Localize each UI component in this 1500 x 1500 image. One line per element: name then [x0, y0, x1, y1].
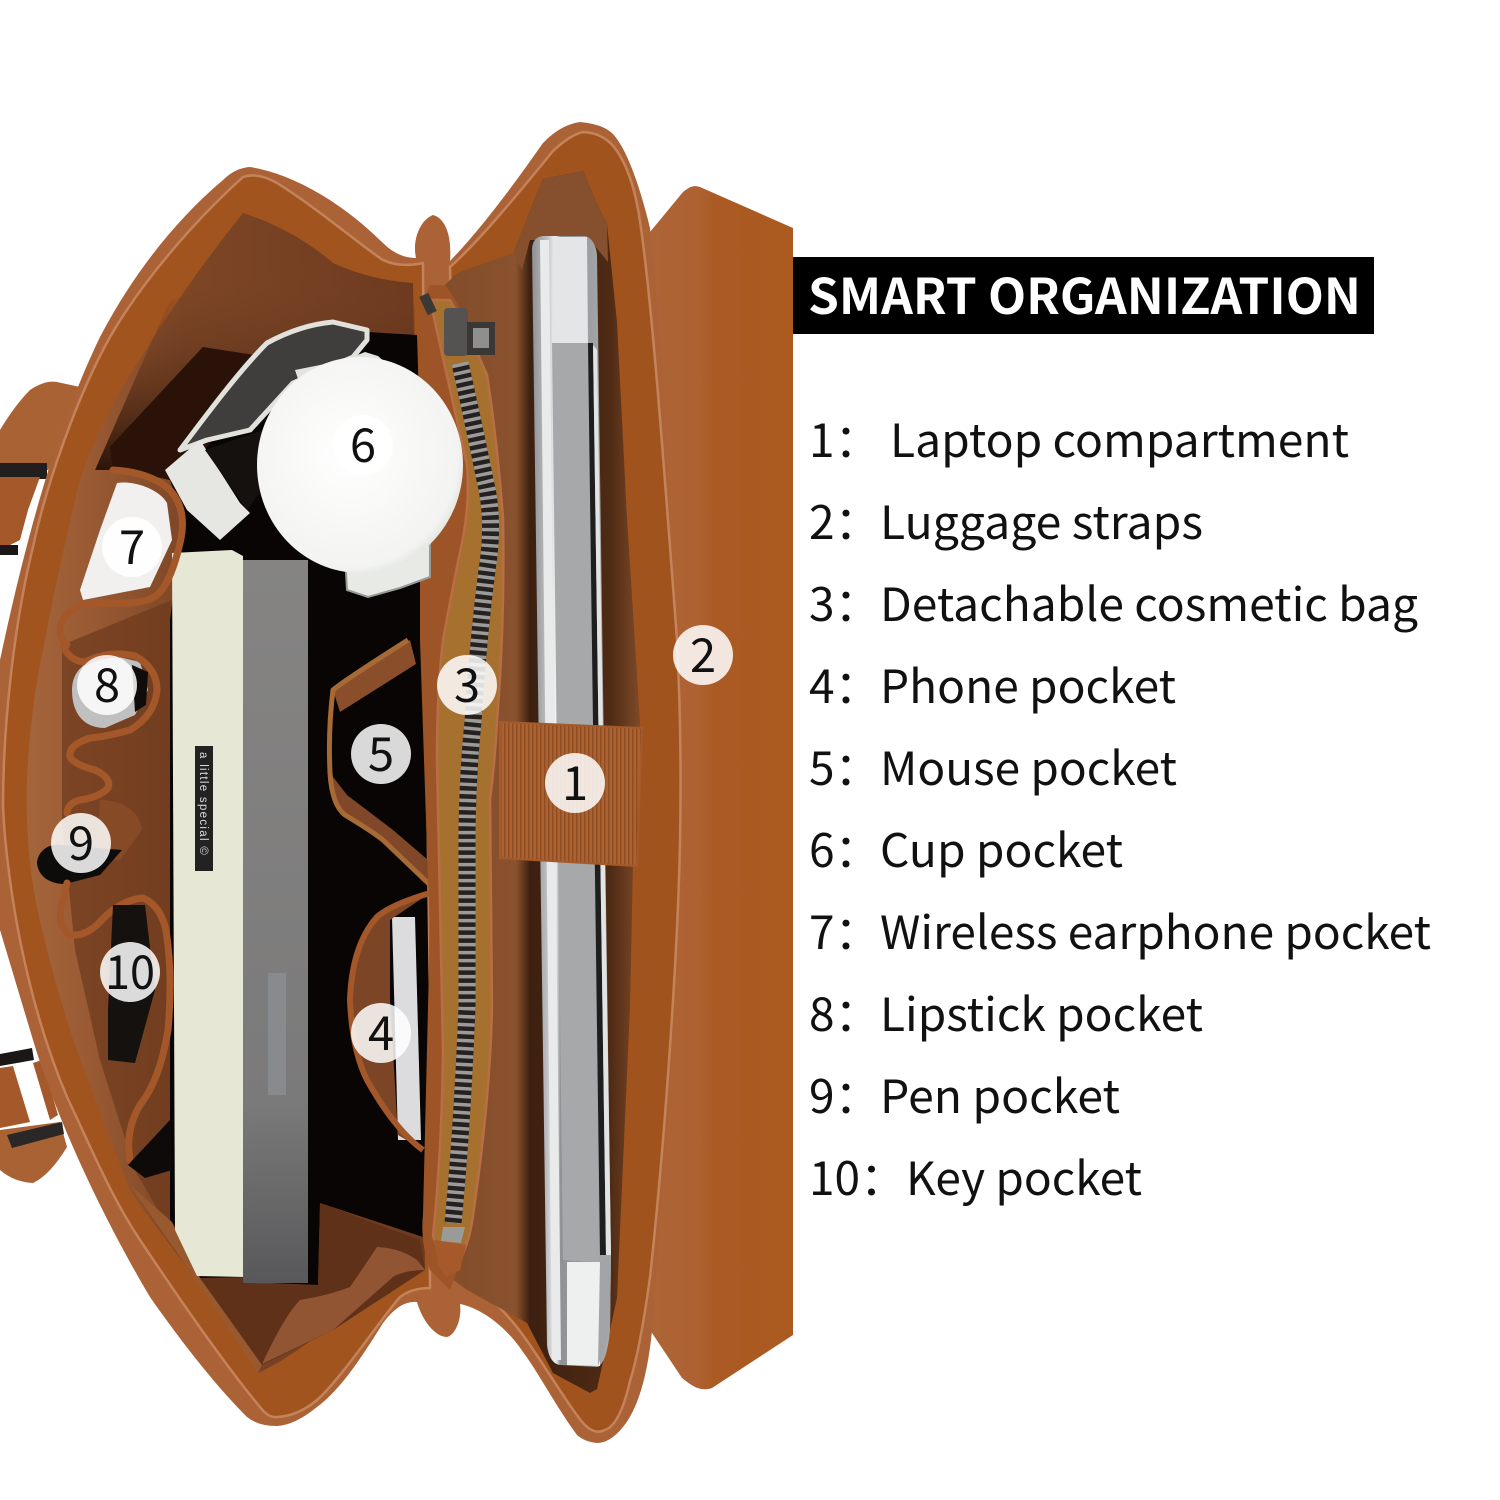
right lining top fold [513, 171, 608, 270]
dark interior [110, 330, 432, 1285]
item 7: Wireless earphone pocket [880, 897, 1431, 963]
left compartment wall with piping [3, 175, 430, 1417]
item 10: 10： [809, 1143, 906, 1209]
bottom side handle [0, 1048, 67, 1183]
legend list [809, 405, 1431, 1209]
callout 4 [351, 995, 411, 1064]
item 10: Key pocket [906, 1143, 1142, 1209]
item 6: Cup pocket [880, 815, 1123, 881]
item 5: Mouse pocket [880, 733, 1177, 799]
right compartment wall with piping [450, 132, 681, 1432]
item 3: Detachable cosmetic bag [880, 569, 1418, 635]
item 6: 6： [809, 815, 881, 881]
callout 9: 9 [68, 805, 94, 874]
phone pocket [350, 893, 430, 1150]
item 8: Lipstick pocket [880, 979, 1203, 1045]
item 2: 2： [809, 487, 881, 553]
item 3: 3： [809, 569, 881, 635]
earphone pocket [60, 470, 182, 645]
callout 10: 10 [105, 934, 155, 1003]
notebook label [195, 746, 213, 871]
item 1: 1： [809, 405, 881, 471]
notebook label: a little special © [197, 752, 209, 856]
belt strap [165, 322, 367, 540]
callout 2: 2 [690, 617, 716, 686]
item 5: 5： [809, 733, 881, 799]
top side handle [0, 382, 80, 555]
callout 9 [51, 805, 111, 874]
dark brown upper interior [110, 345, 290, 480]
mouse pocket [329, 640, 430, 888]
callout 1: 1 [562, 745, 588, 814]
lining floor [200, 1203, 425, 1365]
laptop [532, 236, 611, 1367]
lining shadow [95, 265, 415, 470]
callout 7: 7 [119, 509, 145, 578]
callout 2 [673, 617, 733, 686]
grey box [243, 560, 308, 1283]
item 9: 9： [809, 1061, 881, 1127]
pocket panel shading [62, 600, 172, 1235]
white notebook [172, 550, 245, 1277]
item 1: Laptop compartment [890, 405, 1349, 471]
item 4: 4： [809, 651, 881, 717]
callout 8: 8 [94, 647, 120, 716]
callout 4: 4 [368, 995, 394, 1064]
key pocket contents [108, 905, 172, 1178]
luggage strap flap [650, 186, 793, 1389]
callout 3 [437, 647, 497, 716]
item 2: Luggage straps [880, 487, 1203, 553]
callout 6 [333, 407, 393, 476]
lipstick pocket [63, 647, 157, 813]
callout 6: 6 [350, 407, 376, 476]
item 7: 7： [809, 897, 881, 963]
detachable cosmetic bag with zipper [419, 285, 503, 1290]
callout 3: 3 [454, 647, 480, 716]
callout 1 [545, 745, 605, 814]
outer bag shell [0, 122, 680, 1443]
elastic strap [500, 722, 642, 866]
item 9: Pen pocket [880, 1061, 1120, 1127]
title banner: SMART ORGANIZATION [808, 258, 1361, 329]
lower lining stripe [130, 1185, 262, 1373]
left compartment lining [27, 213, 425, 1373]
pen pocket [37, 800, 170, 1160]
callout 8 [77, 647, 137, 716]
item 4: Phone pocket [880, 651, 1176, 717]
callout 7 [102, 509, 162, 578]
callout 5: 5 [368, 716, 394, 785]
bag illustration [0, 122, 793, 1443]
callout 5 [351, 716, 411, 785]
item 8: 8： [809, 979, 881, 1045]
cup [257, 352, 463, 597]
right compartment lining [440, 171, 640, 1393]
